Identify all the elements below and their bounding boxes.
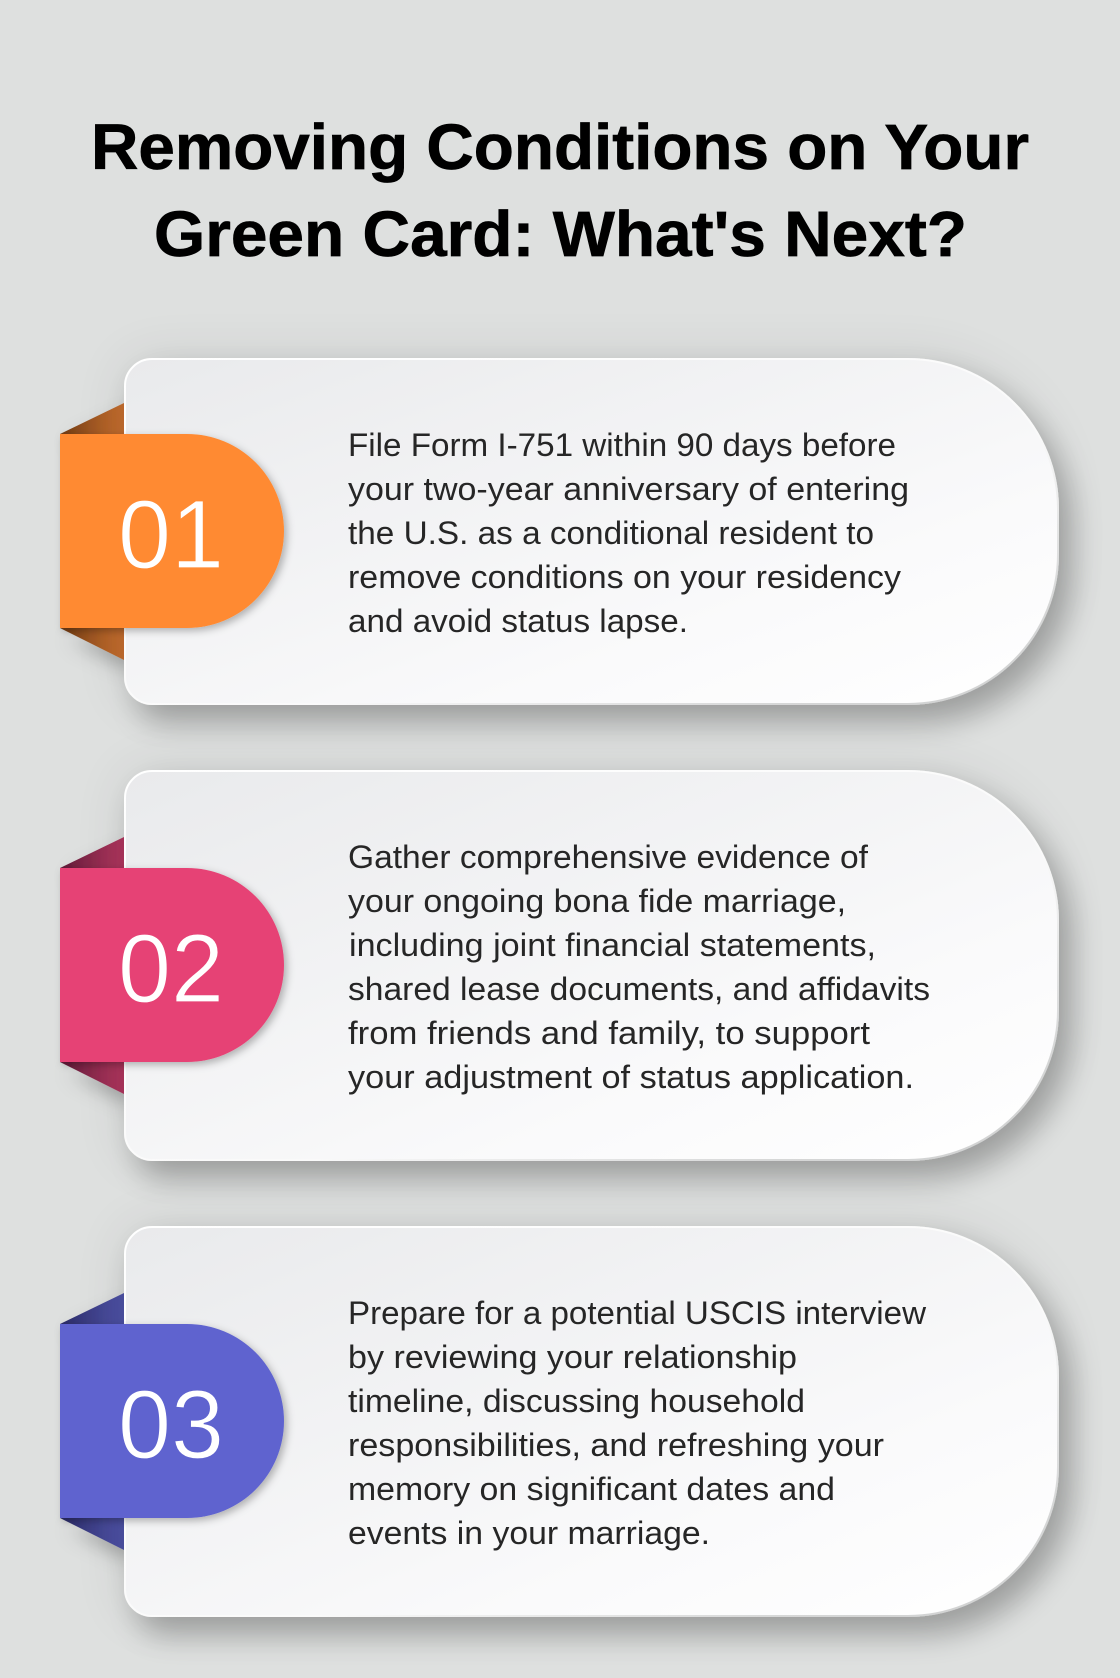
number badge: step 2 <box>60 868 284 1062</box>
number badge: step 2: 02 <box>118 914 224 1023</box>
card: step 2 <box>125 771 1058 1160</box>
text: step 3: memory on significant dates and <box>348 1471 835 1507</box>
text: step 2: including joint financial statements, <box>349 927 876 963</box>
text: step 3: events in your marriage. <box>348 1515 710 1551</box>
ribbon folds: step 2 <box>60 837 124 1094</box>
text: step 2: shared lease documents, and affidavits <box>348 971 930 1007</box>
text: step 1 <box>348 427 909 639</box>
panel: step 1 <box>60 359 1058 704</box>
text: step 3 <box>348 1295 927 1551</box>
text: step 1: and avoid status lapse. <box>348 603 688 639</box>
text: step 1: remove conditions on your residency <box>348 559 901 595</box>
ribbon folds: step 1 <box>60 403 124 660</box>
text: step 3: timeline, discussing household <box>348 1383 805 1419</box>
ribbon folds: step 3 <box>60 1293 124 1550</box>
text: step 2: your adjustment of status application. <box>348 1059 914 1095</box>
title: Green Card: What's Next? <box>154 198 967 270</box>
panel: step 3 <box>60 1227 1058 1616</box>
text: step 1: your two-year anniversary of entering <box>348 471 909 507</box>
text: step 3: responsibilities, and refreshing your <box>348 1427 884 1463</box>
number badge: step 1 <box>60 434 284 628</box>
number badge: step 3 <box>60 1324 284 1518</box>
number badge: step 1: 01 <box>118 480 224 589</box>
text: step 3: Prepare for a potential USCIS interview <box>348 1295 927 1331</box>
title: Removing Conditions on Your <box>91 111 1029 183</box>
text: step 2: Gather comprehensive evidence of <box>348 839 868 875</box>
text: step 2: from friends and family, to support <box>348 1015 870 1051</box>
card: step 3 <box>125 1227 1058 1616</box>
title <box>91 111 1029 270</box>
text: step 1: the U.S. as a conditional resident to <box>348 515 874 551</box>
card: step 1 <box>125 359 1058 704</box>
text: step 1: File Form I-751 within 90 days before <box>348 427 896 463</box>
text: step 2: your ongoing bona fide marriage, <box>348 883 846 919</box>
text: step 2 <box>348 839 930 1095</box>
panel: step 2 <box>60 771 1058 1160</box>
text: step 3: by reviewing your relationship <box>348 1339 797 1375</box>
number badge: step 3: 03 <box>118 1370 224 1479</box>
